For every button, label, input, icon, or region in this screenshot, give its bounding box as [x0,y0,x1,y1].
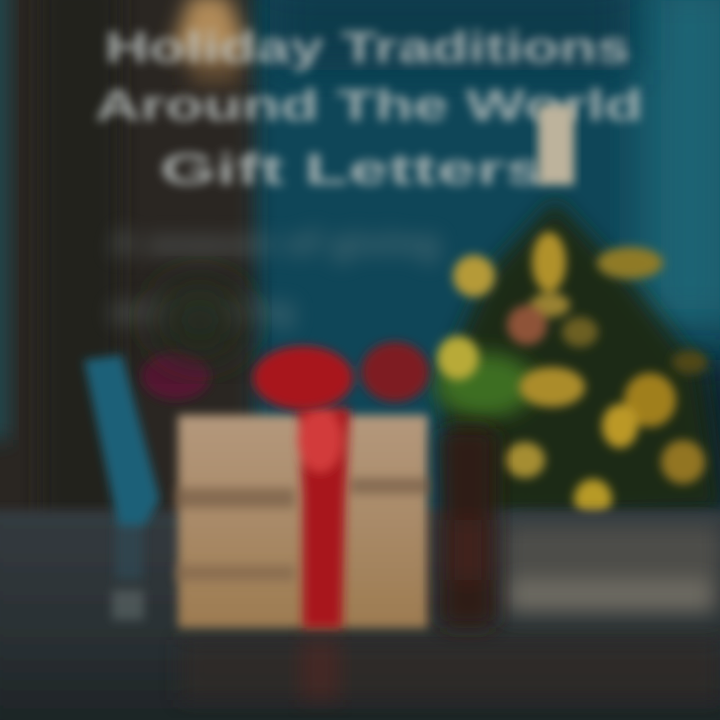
title: Around The World [95,81,643,130]
floor [0,510,720,720]
title: Holiday Traditions [105,23,630,72]
body text lines [110,222,440,330]
ornaments [437,232,708,519]
reflections [300,640,340,700]
bow [253,342,429,410]
blue vase [84,355,160,620]
title: Gift Letters [160,145,545,194]
gift box [175,342,430,628]
lamp [170,0,250,85]
dark bottle [440,428,496,628]
silver base under tree [505,525,720,615]
body text lines: A season of giving [110,222,440,263]
dark leaves [155,280,245,360]
ribbon [298,408,350,628]
body text lines: and sharing [110,289,295,330]
title [95,23,643,194]
christmas tree [435,200,720,520]
candle on tree top [538,105,574,185]
purple flower [142,352,210,400]
